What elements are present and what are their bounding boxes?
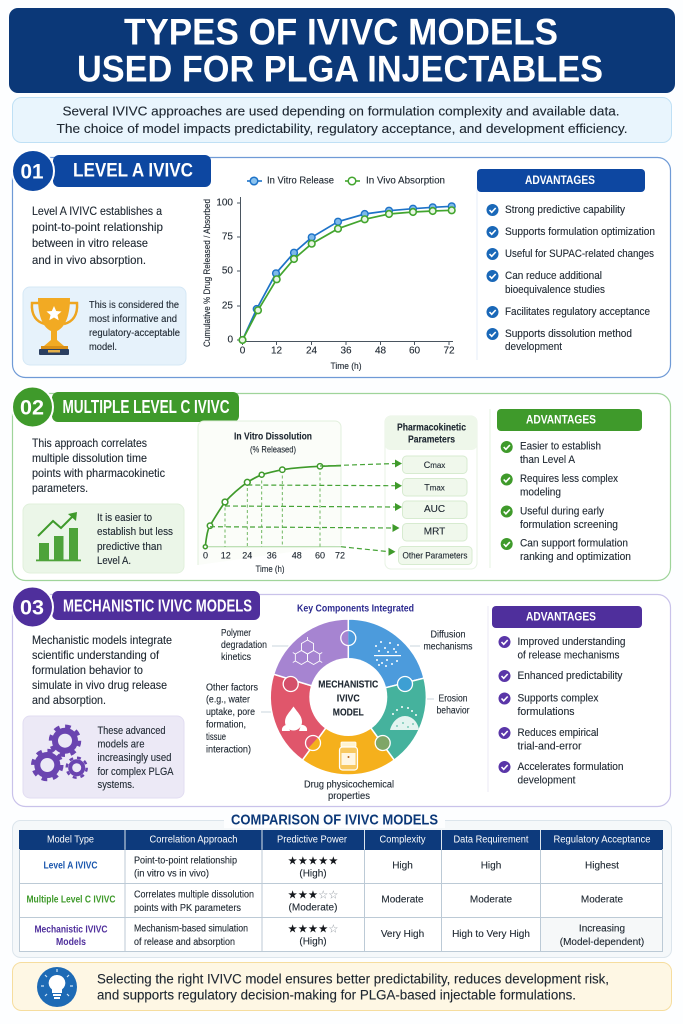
title banner <box>9 8 675 93</box>
line chart: release vs absorption: 48 <box>375 346 386 356</box>
line chart: release vs absorption: 100 <box>216 198 233 208</box>
table row: Multiple Level C IVIVC: ★★★☆☆ <box>288 888 338 902</box>
icon: diffusion particles <box>374 641 401 667</box>
section heading: 01 Level A IVIVC <box>12 150 211 192</box>
table row: Level A IVIVC: Highest <box>585 860 619 872</box>
table row: Multiple Level C IVIVC: points with PK parameters <box>134 903 241 914</box>
advantages list: Level A: Can reduce additional <box>505 270 602 282</box>
table row: Multiple Level C IVIVC: Multiple Level C IVIVC <box>26 894 116 906</box>
advantages list: Mechanistic: of release mechanisms <box>518 650 620 662</box>
advantages header <box>492 606 642 628</box>
description text: scientific understanding of <box>32 648 160 662</box>
line chart: release vs absorption <box>202 176 455 371</box>
table row: Multiple Level C IVIVC: (Moderate) <box>289 902 337 914</box>
diagram: key components donut: Other factors <box>206 682 258 694</box>
table row: Mechanistic IVIVC Models: (Model-dependent) <box>560 937 644 948</box>
panel: pharmacokinetic parameters: Parameters <box>408 434 455 446</box>
line chart: release vs absorption: Time (h) <box>330 361 362 371</box>
panel: Level A IVIVC <box>12 150 670 378</box>
advantages list: Mechanistic: Reduces empirical <box>518 727 598 739</box>
callout: most informative model: regulatory-acceptable <box>89 328 180 339</box>
diagram: key components donut: behavior <box>436 706 470 716</box>
advantages header: ADVANTAGES <box>526 612 596 624</box>
advantages list: Multiple Level C: Requires less complex <box>520 473 618 485</box>
advantages list: Level A: Supports dissolution method <box>505 328 632 340</box>
line chart: release vs absorption: 12 <box>271 346 282 356</box>
advantages list: Multiple Level C: Can support formulation <box>520 538 628 550</box>
diagram: key components donut: Polymer <box>221 628 252 639</box>
description text <box>32 633 172 707</box>
advantages list: Mechanistic: Accelerates formulation <box>518 761 624 773</box>
diagram: key components donut: Drug physicochemical <box>304 780 394 790</box>
description text <box>32 436 165 495</box>
series: in vitro release <box>242 203 455 340</box>
advantages list: Multiple Level C: ranking and optimization <box>520 551 631 563</box>
table row: Mechanistic IVIVC Models: (High) <box>299 936 327 948</box>
panel: pharmacokinetic parameters: Pharmacokinetic <box>397 422 466 434</box>
icon: rising bar chart <box>36 512 81 561</box>
diagram: key components donut <box>206 604 472 802</box>
diagram: key components donut: IVIVC <box>337 694 360 704</box>
callout: advanced models: increasingly used <box>98 752 172 764</box>
section heading: 03 Mechanistic IVIVC Models: MECHANISTIC IVIVC MODELS <box>63 596 252 616</box>
panel: Mechanistic IVIVC Models <box>12 586 670 806</box>
section heading: 02 Multiple Level C IVIVC: 02 <box>20 396 44 420</box>
advantages list: Multiple Level C: formulation screening <box>520 519 618 531</box>
connector nodes <box>283 630 412 750</box>
chart: in vitro dissolution: 0 <box>203 550 208 560</box>
table row: Multiple Level C IVIVC: Moderate <box>470 894 513 906</box>
line chart: release vs absorption: 75 <box>222 232 233 242</box>
diagram: key components donut: Key Components Integrated <box>297 604 414 614</box>
section heading: 01 Level A IVIVC: LEVEL A IVIVC <box>73 160 193 182</box>
diagram: key components donut: kinetics <box>221 652 251 663</box>
description text: multiple dissolution time <box>32 451 147 465</box>
table row: Mechanistic IVIVC Models: High to Very High <box>452 929 530 940</box>
table row: Mechanistic IVIVC Models: Mechanism-based simulation <box>134 924 248 934</box>
diagram: key components donut: mechanisms <box>424 642 472 652</box>
advantages list: Level A: Facilitates regulatory acceptance <box>505 306 650 318</box>
advantages list: Multiple Level C: than Level A <box>520 454 576 466</box>
comparison table: Correlation Approach <box>150 834 238 846</box>
advantages list: Mechanistic: Supports complex <box>518 692 599 704</box>
comparison table: Data Requirement <box>454 834 529 846</box>
line chart: release vs absorption: 36 <box>340 346 352 356</box>
line chart: release vs absorption: 72 <box>443 346 455 356</box>
comparison heading: COMPARISON OF IVIVC MODELS <box>231 812 438 828</box>
section heading: 03 Mechanistic IVIVC Models: 03 <box>20 596 44 620</box>
table row: Mechanistic IVIVC Models: Increasing <box>579 924 625 934</box>
callout: most informative model: This is considered the <box>89 300 179 311</box>
series: in vivo absorption <box>239 207 455 343</box>
diagram: key components donut: Erosion <box>438 694 468 704</box>
callout: advanced models: These advanced <box>98 725 166 737</box>
callout: easier but less predictive: establish but less <box>97 526 173 538</box>
diagram: key components donut: MODEL <box>333 708 364 718</box>
advantages list: Multiple Level C: modeling <box>520 486 561 498</box>
chart: in vitro dissolution: 12 <box>221 550 231 560</box>
panel: pharmacokinetic parameters <box>385 416 477 569</box>
advantages list: Mechanistic: development <box>518 774 576 786</box>
description text: Mechanistic models integrate <box>32 633 172 647</box>
icon: light bulb <box>37 967 77 1007</box>
callout: easier but less predictive: predictive than <box>97 541 162 553</box>
chart legend <box>247 176 445 186</box>
description text: Level A IVIVC establishes a <box>32 204 162 218</box>
footer callout <box>12 962 672 1010</box>
chart: in vitro dissolution: In Vitro Dissolution <box>234 432 312 442</box>
icon: erosion mound <box>390 706 419 730</box>
advantages list: Level A: development <box>505 341 562 353</box>
chart: in vitro dissolution: 48 <box>292 550 302 560</box>
icon: water drop <box>282 706 307 731</box>
line chart: release vs absorption: 50 <box>222 266 233 276</box>
table row: Mechanistic IVIVC Models: Very High <box>381 929 424 940</box>
table row: Multiple Level C IVIVC: Correlates multiple dissolution <box>134 890 254 900</box>
description text: formulation behavior to <box>32 663 143 677</box>
chart: in vitro dissolution: 72 <box>335 550 345 560</box>
advantages header: ADVANTAGES <box>525 175 595 187</box>
comparison table: Model Type <box>47 834 94 846</box>
table row: Level A IVIVC: (High) <box>299 868 327 880</box>
advantages header <box>497 409 642 431</box>
diagram: key components donut: tissue <box>206 732 226 743</box>
callout: easier but less predictive: It is easier to <box>97 512 152 524</box>
title banner: TYPES OF IVIVC MODELS <box>124 12 558 52</box>
advantages list: Level A <box>477 169 655 360</box>
advantages list: Level A: Strong predictive capability <box>505 204 625 216</box>
callout: most informative model: model. <box>89 342 117 353</box>
chart: in vitro dissolution <box>198 421 345 574</box>
callout: most informative model <box>23 287 186 365</box>
intro text block: Several IVIVC approaches are used depending on formulation complexity and available data. <box>62 104 620 118</box>
comparison table <box>19 830 663 952</box>
advantages list: Level A: Supports formulation optimization <box>505 226 655 238</box>
section heading: 03 Mechanistic IVIVC Models <box>12 586 260 628</box>
line chart: release vs absorption: 25 <box>222 300 233 312</box>
dissolution curve <box>203 464 341 549</box>
description text: and absorption. <box>32 693 106 707</box>
intro text block <box>12 98 672 142</box>
table row: Mechanistic IVIVC Models: of release and absorption <box>134 937 235 948</box>
chart: in vitro dissolution: 60 <box>315 550 325 560</box>
table row: Level A IVIVC <box>44 854 619 880</box>
panel: pharmacokinetic parameters: Cmax <box>424 460 445 470</box>
section heading: 02 Multiple Level C IVIVC: MULTIPLE LEVEL C IVIVC <box>62 397 230 417</box>
advantages list: Mechanistic <box>488 606 642 792</box>
chart: in vitro dissolution: (% Released) <box>250 444 296 454</box>
panel: pharmacokinetic parameters: AUC <box>424 504 445 515</box>
table row: Level A IVIVC: High <box>481 860 501 872</box>
table row: Level A IVIVC: Level A IVIVC <box>44 860 98 872</box>
icon: trophy <box>32 298 77 355</box>
description text: simulate in vivo drug release <box>32 678 167 692</box>
footer callout: Selecting the right IVIVC model ensures better predictability, reduces development risk, <box>97 972 609 986</box>
diagram: key components donut: (e.g., water <box>206 694 251 706</box>
table row: Level A IVIVC: High <box>392 860 413 872</box>
advantages list: Multiple Level C: Useful during early <box>520 506 604 518</box>
callout: advanced models: models are <box>98 738 144 750</box>
line chart: release vs absorption: 60 <box>409 346 420 356</box>
callout: easier but less predictive <box>23 504 184 573</box>
advantages list: Mechanistic: Improved understanding <box>518 636 626 648</box>
description text: This approach correlates <box>32 436 147 450</box>
comparison table: Complexity <box>380 834 426 846</box>
table row: Level A IVIVC: (in vitro vs in vivo) <box>134 868 209 880</box>
table row: Multiple Level C IVIVC: Moderate <box>381 894 424 906</box>
line chart: release vs absorption: 24 <box>306 346 317 356</box>
table row: Multiple Level C IVIVC <box>26 888 624 914</box>
table row: Multiple Level C IVIVC: Moderate <box>581 894 624 906</box>
advantages header: ADVANTAGES <box>526 414 596 426</box>
table row: Mechanistic IVIVC Models: Models <box>56 937 86 948</box>
description text: point-to-point relationship <box>32 220 163 234</box>
diagram: key components donut: interaction) <box>206 744 251 756</box>
panel: comparison of IVIVC models <box>12 812 672 958</box>
description text: and in vivo absorption. <box>32 253 146 267</box>
panel: pharmacokinetic parameters: Tmax <box>424 482 445 492</box>
callout: advanced models: for complex PLGA <box>98 766 174 778</box>
diagram: key components donut: properties <box>328 791 370 802</box>
title banner: USED FOR PLGA INJECTABLES <box>77 48 603 90</box>
panel: pharmacokinetic parameters: Other Parameters <box>402 550 468 560</box>
advantages list: Level A: Useful for SUPAC-related changes <box>505 248 654 260</box>
table row: Mechanistic IVIVC Models: Mechanistic IVIVC <box>34 924 108 936</box>
table row: Mechanistic IVIVC Models: ★★★★☆ <box>288 922 338 936</box>
chart legend: In Vivo Absorption <box>366 176 445 186</box>
line chart: release vs absorption: 0 <box>227 334 233 346</box>
intro text block: The choice of model impacts predictability, regulatory acceptance, and development efficiency. <box>56 121 628 136</box>
chart: in vitro dissolution: 36 <box>267 550 277 560</box>
diagram: key components donut: Diffusion <box>430 630 466 640</box>
advantages list: Mechanistic: trial-and-error <box>518 740 582 752</box>
description text: points with pharmacokinetic <box>32 466 165 480</box>
diagram: key components donut: uptake, pore <box>206 707 255 718</box>
panel: Multiple Level C IVIVC <box>12 386 670 580</box>
chart: in vitro dissolution: Time (h) <box>256 564 284 574</box>
advantages list: Mechanistic: formulations <box>518 706 575 718</box>
icon: drug vial <box>340 742 358 770</box>
advantages list: Level A: bioequivalence studies <box>505 284 605 296</box>
line chart: release vs absorption: Cumulative % Drug Released / Absorbed <box>202 199 212 347</box>
callout: most informative model: most informative and <box>89 314 177 325</box>
footer callout: and supports regulatory decision-making for PLGA-based injectable formulations. <box>97 988 576 1002</box>
diagram: key components donut: degradation <box>221 640 267 651</box>
chart: in vitro dissolution: 24 <box>242 550 252 560</box>
table row: Level A IVIVC: Point-to-point relationship <box>134 856 237 866</box>
table row: Mechanistic IVIVC Models <box>34 922 644 948</box>
table row: Level A IVIVC: ★★★★★ <box>288 854 338 868</box>
description text <box>32 204 163 267</box>
diagram: key components donut: formation, <box>206 720 246 730</box>
comparison table: Regulatory Acceptance <box>554 834 651 846</box>
advantages list: Multiple Level C <box>490 409 642 568</box>
callout: advanced models: systems. <box>98 779 134 791</box>
section heading: 02 Multiple Level C IVIVC <box>12 386 239 428</box>
icon: gears <box>33 726 87 780</box>
advantages list: Mechanistic: Enhanced predictability <box>518 670 623 682</box>
advantages list: Multiple Level C: Easier to establish <box>520 440 601 452</box>
comparison table: Predictive Power <box>277 834 348 846</box>
callout: easier but less predictive: Level A. <box>97 555 131 567</box>
diagram: key components donut: MECHANISTIC <box>318 680 378 690</box>
callout: advanced models <box>23 716 184 798</box>
chart legend: In Vitro Release <box>267 176 334 186</box>
line chart: release vs absorption: 0 <box>240 346 246 356</box>
panel: pharmacokinetic parameters: MRT <box>424 526 445 538</box>
advantages header <box>477 169 645 192</box>
description text: parameters. <box>32 481 88 495</box>
section heading: 01 Level A IVIVC: 01 <box>20 160 44 184</box>
arrows: dissolution points to PK parameters <box>210 460 402 556</box>
description text: between in vitro release <box>32 236 148 250</box>
icon: polymer hexagons <box>293 637 322 664</box>
